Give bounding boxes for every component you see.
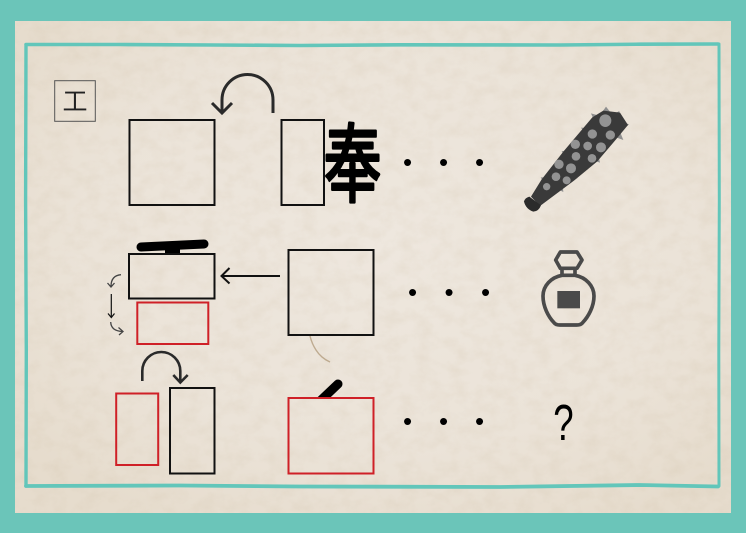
blank square	[288, 250, 374, 335]
curved arrow left	[212, 75, 273, 113]
small curved arrow bottom	[111, 322, 123, 335]
dots: •	[408, 277, 417, 307]
dots: •	[403, 147, 412, 177]
dots: •	[475, 147, 484, 177]
category label box: 工	[62, 88, 88, 116]
left arrow	[222, 268, 280, 284]
row 2 puzzle	[108, 244, 490, 344]
narrow blank box	[282, 120, 324, 205]
kanji: 奉	[323, 118, 382, 214]
top box	[129, 254, 214, 298]
blank square	[130, 120, 214, 205]
black narrow box	[170, 388, 214, 474]
dots: •	[403, 406, 412, 436]
dots: •	[439, 147, 448, 177]
small curved arrow top	[108, 275, 121, 287]
icon: spiked club	[524, 107, 629, 212]
row 3 puzzle	[116, 352, 574, 474]
dots: •	[439, 406, 448, 436]
dots: •	[475, 406, 484, 436]
curved arrow right	[142, 352, 188, 382]
dots: •	[481, 277, 490, 307]
red square	[288, 398, 374, 474]
black slash	[318, 384, 338, 403]
icon: perfume bottle	[543, 252, 594, 325]
dots: •	[444, 277, 454, 307]
category label box	[55, 81, 95, 121]
small down arrow	[108, 294, 114, 318]
question mark: ?	[553, 395, 574, 451]
stem	[165, 249, 180, 254]
red narrow box	[116, 394, 158, 465]
thick black stroke on top	[141, 244, 204, 247]
red box	[137, 302, 208, 344]
teal hand-drawn frame	[26, 44, 719, 487]
row 1 puzzle	[130, 75, 484, 214]
